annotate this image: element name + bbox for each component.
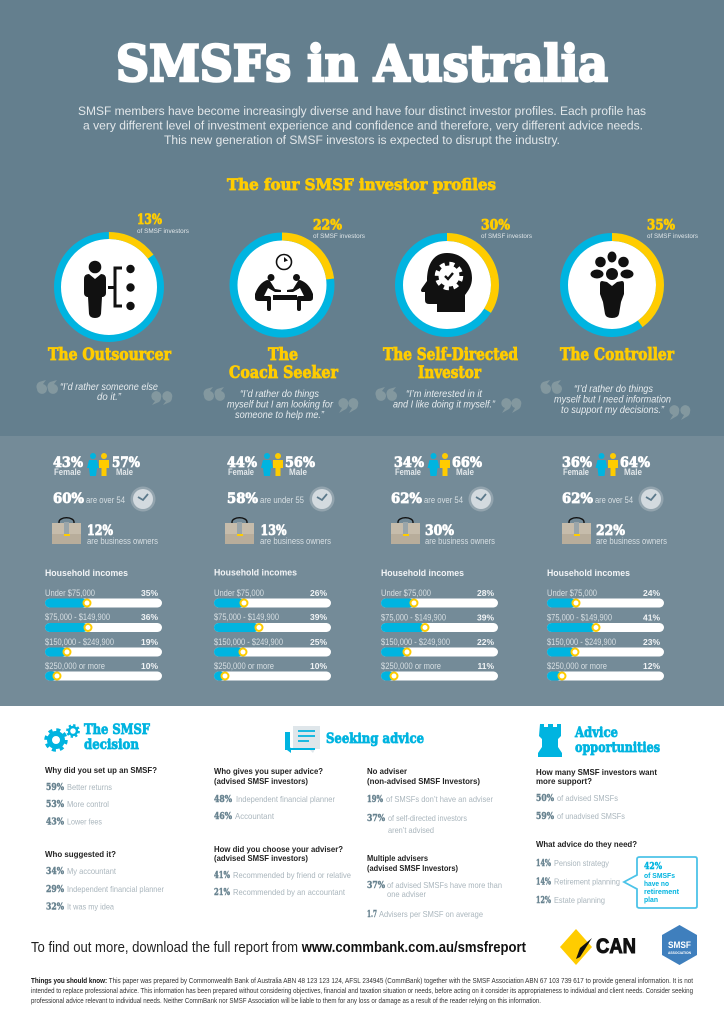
share label 35%: 35% bbox=[647, 218, 675, 234]
ring chart bbox=[399, 237, 495, 333]
household incomes bars: Household incomes bbox=[45, 568, 128, 579]
household incomes bars: $250,000 or more bbox=[381, 661, 441, 671]
demographics column 1 bbox=[45, 453, 162, 680]
callout: no retirement plan: have no bbox=[644, 879, 669, 888]
age stat: are over 54 bbox=[424, 495, 463, 505]
disclaimer: professional advice relevant to individual needs. Neither CommBank nor SMSF Association will be liable to them for any loss or damage as a result of the reader relying on this information. bbox=[31, 998, 541, 1005]
callout: no retirement plan: 42% bbox=[644, 861, 662, 872]
quote: and I like doing it myself.” bbox=[393, 400, 496, 410]
question: who suggested bbox=[45, 849, 164, 912]
question: multiple advisers: 1.7 bbox=[367, 909, 377, 920]
age stat: 60% bbox=[53, 491, 84, 507]
share label 35% bbox=[647, 218, 699, 240]
question: why set up: Why did you set up an SMSF? bbox=[45, 765, 157, 775]
heading: The SMSF bbox=[84, 722, 150, 738]
icon: person with options bbox=[84, 261, 135, 318]
question: advice needed: Retirement planning bbox=[554, 876, 620, 886]
panel: seeking advice bbox=[214, 726, 502, 920]
household incomes bars: 41% bbox=[643, 612, 660, 622]
household incomes bars: 10% bbox=[141, 661, 158, 671]
share label 13% bbox=[137, 212, 190, 235]
question: multiple advisers bbox=[367, 853, 502, 920]
household incomes bars: $150,000 - $249,900 bbox=[214, 637, 283, 647]
gender split bbox=[53, 453, 140, 477]
question: more support: of advised SMSFs bbox=[557, 793, 618, 803]
household incomes bars: Under $75,000 bbox=[381, 588, 431, 598]
gender split: Female bbox=[563, 467, 589, 477]
icon: head with gear bbox=[421, 253, 472, 312]
question: no adviser: No adviser bbox=[367, 766, 408, 776]
profile name bbox=[383, 345, 518, 382]
age stat: 58% bbox=[227, 491, 258, 507]
household incomes bars: $150,000 - $249,900 bbox=[45, 637, 114, 647]
business owners stat: 30% bbox=[425, 523, 454, 539]
gender split: Female bbox=[228, 467, 254, 477]
business owners stat: 13% bbox=[260, 523, 286, 539]
question: who gives advice: Who gives you super advice? bbox=[214, 766, 323, 776]
heading: opportunities bbox=[575, 740, 660, 756]
profile: The Controller bbox=[540, 218, 699, 420]
question: no adviser: aren’t advised bbox=[388, 825, 434, 835]
profile name bbox=[229, 345, 338, 382]
business owners stat bbox=[225, 518, 331, 546]
demographics column 2 bbox=[214, 453, 334, 680]
callout: no retirement plan: plan bbox=[644, 895, 658, 904]
question: how chosen: 21% bbox=[214, 887, 230, 898]
gender split: Male bbox=[624, 467, 642, 477]
household incomes bars bbox=[45, 568, 162, 680]
household incomes bars: 28% bbox=[477, 588, 494, 598]
household incomes bars: $75,000 - $149,900 bbox=[381, 612, 446, 622]
logo: SMSF Association: SMSF bbox=[668, 940, 691, 950]
age stat bbox=[391, 486, 494, 512]
profile name: The Self-Directed bbox=[383, 345, 518, 364]
household incomes bars: 12% bbox=[643, 661, 660, 671]
household incomes bars: 19% bbox=[141, 637, 158, 647]
gender split: 36% bbox=[562, 455, 592, 471]
household incomes bars: $150,000 - $249,900 bbox=[381, 637, 450, 647]
question: who suggested: 32% bbox=[46, 902, 64, 912]
question: more support: of unadvised SMSFs bbox=[557, 811, 625, 821]
question: multiple advisers: 37% bbox=[367, 880, 385, 891]
profile: The Outsourcer bbox=[36, 212, 190, 405]
household incomes bars: 26% bbox=[310, 588, 327, 598]
quote: myself but I am looking for bbox=[227, 400, 334, 410]
icon: adviser meeting bbox=[255, 254, 313, 311]
ring chart bbox=[564, 237, 660, 333]
household incomes bars: Under $75,000 bbox=[214, 588, 264, 598]
question: more support: 50% bbox=[536, 793, 554, 804]
intro text: SMSF members have become increasingly diverse and have four distinct investor profiles. Each profile has bbox=[78, 104, 646, 118]
share label 22%: of SMSF investors bbox=[313, 233, 366, 240]
question: why set up: 59% bbox=[46, 782, 64, 793]
household incomes bars: Under $75,000 bbox=[45, 588, 95, 598]
demographics column 4 bbox=[547, 453, 667, 680]
question: advice needed: 12% bbox=[536, 895, 551, 906]
quote bbox=[540, 380, 690, 420]
question: multiple advisers: Advisers per SMSF on average bbox=[379, 909, 483, 919]
demographics column 3 bbox=[381, 453, 498, 680]
quote bbox=[375, 387, 521, 413]
question: who suggested: Independent financial planner bbox=[67, 884, 164, 894]
call to action: To find out more, download the full report from www.commbank.com.au/smsfreport bbox=[31, 939, 526, 956]
household incomes bars: 36% bbox=[141, 612, 158, 622]
question: how chosen: Recommended by an accountant bbox=[233, 887, 346, 897]
business owners stat: are business owners bbox=[87, 536, 158, 546]
question: more support: How many SMSF investors want bbox=[536, 767, 657, 777]
heading bbox=[84, 722, 150, 753]
gender split: Female bbox=[395, 467, 421, 477]
heading: Seeking advice bbox=[326, 731, 424, 747]
gender split: Female bbox=[54, 467, 81, 477]
question: no adviser: of SMSFs don’t have an adviser bbox=[386, 794, 493, 804]
question: advice needed: What advice do they need? bbox=[536, 839, 637, 849]
callout: no retirement plan: retirement bbox=[644, 887, 680, 896]
question: who gives advice: 46% bbox=[214, 811, 232, 822]
share label 13%: of SMSF investors bbox=[137, 228, 190, 235]
question: how chosen bbox=[214, 844, 351, 898]
share label 22% bbox=[313, 218, 366, 240]
question: how chosen: Recommended by friend or relative bbox=[233, 870, 351, 880]
heading: Advice bbox=[574, 725, 618, 741]
callout: no retirement plan bbox=[624, 857, 697, 908]
household incomes bars: 23% bbox=[643, 637, 660, 647]
question: who gives advice: (advised SMSF investors) bbox=[214, 776, 308, 786]
gender split: 56% bbox=[285, 455, 315, 471]
heading bbox=[574, 725, 660, 756]
profile name: Coach Seeker bbox=[229, 363, 338, 382]
household incomes bars: $250,000 or more bbox=[547, 661, 607, 671]
share label 30%: of SMSF investors bbox=[481, 233, 533, 240]
ring chart bbox=[58, 236, 160, 338]
panel: advice opportunities bbox=[536, 724, 697, 908]
share label 35%: of SMSF investors bbox=[647, 233, 699, 240]
household incomes bars: 24% bbox=[643, 588, 660, 598]
question: advice needed: 14% bbox=[536, 876, 551, 888]
question: multiple advisers: one adviser bbox=[387, 889, 426, 899]
household incomes bars: $250,000 or more bbox=[214, 661, 274, 671]
gender split: Male bbox=[456, 467, 474, 477]
gender split: 66% bbox=[452, 455, 482, 471]
household incomes bars: Household incomes bbox=[547, 568, 630, 579]
question: advice needed: Estate planning bbox=[554, 895, 605, 905]
quote bbox=[203, 387, 358, 421]
question: how chosen: (advised SMSF investors) bbox=[214, 853, 308, 863]
question: advice needed bbox=[536, 839, 637, 906]
quote bbox=[36, 380, 172, 405]
household incomes bars: 35% bbox=[141, 588, 158, 598]
question: who gives advice: Independent financial planner bbox=[236, 794, 335, 804]
question: why set up: Lower fees bbox=[67, 816, 102, 826]
question: more support: more support? bbox=[536, 776, 592, 786]
share label 22%: 22% bbox=[313, 218, 342, 234]
question: who gives advice: 48% bbox=[214, 794, 232, 805]
heading: decision bbox=[84, 737, 139, 753]
question: no adviser: 37% bbox=[367, 813, 385, 824]
age stat: are over 54 bbox=[595, 495, 633, 505]
question: who gives advice: Accountant bbox=[235, 811, 275, 821]
household incomes bars: 25% bbox=[310, 637, 327, 647]
age stat bbox=[562, 486, 664, 512]
household incomes bars: $75,000 - $149,900 bbox=[547, 612, 612, 622]
gender split: 64% bbox=[620, 455, 650, 471]
logo: CAN: CAN bbox=[596, 935, 636, 958]
icon: chess rook bbox=[538, 724, 562, 757]
question: no adviser: of self-directed investors bbox=[388, 813, 467, 823]
question: no adviser: 19% bbox=[367, 794, 383, 805]
gender split: Male bbox=[116, 467, 133, 477]
business owners stat: are business owners bbox=[596, 536, 667, 546]
household incomes bars: 22% bbox=[477, 637, 494, 647]
title: SMSFs in Australia bbox=[116, 34, 608, 93]
age stat bbox=[227, 486, 334, 512]
business owners stat bbox=[391, 518, 495, 546]
question: advice needed: 14% bbox=[536, 858, 551, 869]
household incomes bars: 10% bbox=[310, 661, 327, 671]
logo: CAN bbox=[560, 929, 636, 965]
household incomes bars bbox=[214, 568, 331, 680]
logo: SMSF Association bbox=[662, 925, 697, 965]
question: why set up: Better returns bbox=[67, 782, 112, 792]
household incomes bars: 39% bbox=[477, 612, 494, 622]
household incomes bars: Under $75,000 bbox=[547, 588, 597, 598]
callout: no retirement plan: of SMSFs bbox=[644, 871, 675, 880]
demographics background panel bbox=[0, 436, 724, 706]
question: why set up: 43% bbox=[46, 816, 64, 828]
quote: “I’d rather do things bbox=[574, 384, 653, 395]
business owners stat: 12% bbox=[87, 523, 113, 539]
gender split bbox=[227, 453, 315, 477]
business owners stat bbox=[562, 518, 667, 546]
quote: someone to help me.” bbox=[235, 410, 325, 421]
age stat: are under 55 bbox=[260, 495, 304, 505]
share label 30%: 30% bbox=[481, 218, 510, 234]
household incomes bars bbox=[381, 568, 498, 680]
question: advice needed: Pension strategy bbox=[554, 858, 610, 868]
intro text: This new generation of SMSF investors is expected to disrupt the industry. bbox=[164, 133, 560, 147]
icon: speech bubbles bbox=[285, 726, 320, 753]
gender split bbox=[562, 453, 650, 477]
intro text bbox=[78, 104, 646, 147]
question: multiple advisers: (advised SMSF Investors) bbox=[367, 863, 458, 873]
intro text: a very different level of investment experience and confidence and therefore, very different advice needs. bbox=[83, 118, 643, 132]
household incomes bars: Household incomes bbox=[381, 568, 464, 579]
panel: the SMSF decision bbox=[45, 722, 164, 912]
quote: do it.” bbox=[97, 392, 122, 403]
age stat: 62% bbox=[391, 491, 422, 507]
household incomes bars: $75,000 - $149,900 bbox=[214, 612, 279, 622]
profile name: Investor bbox=[418, 363, 481, 382]
household incomes bars: $150,000 - $249,900 bbox=[547, 637, 616, 647]
household incomes bars: 11% bbox=[477, 661, 494, 671]
household incomes bars bbox=[547, 568, 664, 680]
quote: to support my decisions.” bbox=[561, 405, 665, 416]
business owners stat bbox=[52, 518, 158, 546]
household incomes bars: 39% bbox=[310, 612, 327, 622]
question: who gives advice bbox=[214, 766, 335, 822]
age stat bbox=[53, 486, 156, 512]
question: why set up bbox=[45, 765, 157, 828]
share label 13%: 13% bbox=[137, 212, 162, 228]
question: more support: 59% bbox=[536, 811, 554, 822]
disclaimer bbox=[31, 978, 693, 1005]
question: why set up: More control bbox=[67, 799, 109, 809]
quote: “I’d rather someone else bbox=[60, 382, 158, 393]
icon: gears bbox=[46, 725, 79, 750]
share label 30% bbox=[481, 218, 533, 240]
question: no adviser bbox=[367, 766, 493, 835]
question: how chosen: How did you choose your adviser? bbox=[214, 844, 343, 854]
question: who suggested: Who suggested it? bbox=[45, 849, 116, 859]
question: who suggested: 34% bbox=[46, 866, 64, 877]
question: multiple advisers: Multiple advisers bbox=[367, 853, 428, 863]
household incomes bars: $250,000 or more bbox=[45, 661, 105, 671]
business owners stat: 22% bbox=[596, 523, 625, 539]
quote: myself but I need information bbox=[554, 394, 671, 406]
logo: SMSF Association: ASSOCIATION bbox=[668, 951, 691, 955]
section heading: four profiles: The four SMSF investor profiles bbox=[227, 175, 496, 194]
gender split: 43% bbox=[53, 455, 83, 471]
gender split: 57% bbox=[112, 455, 140, 471]
question: who suggested: 29% bbox=[46, 884, 64, 895]
question: multiple advisers: of advised SMSFs have more than bbox=[387, 880, 502, 890]
business owners stat: are business owners bbox=[260, 536, 331, 546]
age stat: are over 54 bbox=[86, 495, 125, 505]
icon: person with ideas bbox=[590, 252, 634, 318]
business owners stat: are business owners bbox=[425, 536, 495, 546]
profile: The Self-Directed Investor bbox=[375, 218, 533, 413]
profile name: The bbox=[268, 345, 298, 364]
profile name: The Controller bbox=[560, 345, 674, 364]
question: why set up: 53% bbox=[46, 799, 64, 810]
quote: “I’d rather do things bbox=[240, 389, 319, 400]
household incomes bars: $75,000 - $149,900 bbox=[45, 612, 110, 622]
quote: “I’m interested in it bbox=[406, 389, 483, 400]
question: who suggested: It was my idea bbox=[67, 902, 114, 912]
question: how chosen: 41% bbox=[214, 870, 230, 881]
question: no adviser: (non-advised SMSF Investors) bbox=[367, 776, 480, 786]
profile name: The Outsourcer bbox=[48, 345, 171, 364]
question: who suggested: My accountant bbox=[67, 866, 117, 876]
gender split: 44% bbox=[227, 455, 257, 471]
gender split: 34% bbox=[394, 455, 424, 471]
gender split: Male bbox=[289, 467, 307, 477]
household incomes bars: Household incomes bbox=[214, 568, 297, 578]
gender split bbox=[394, 453, 482, 477]
top background panel bbox=[0, 0, 724, 436]
ring chart bbox=[234, 236, 330, 334]
age stat: 62% bbox=[562, 491, 593, 507]
profile: The Coach Seeker bbox=[203, 218, 366, 421]
question: more support bbox=[536, 767, 657, 822]
